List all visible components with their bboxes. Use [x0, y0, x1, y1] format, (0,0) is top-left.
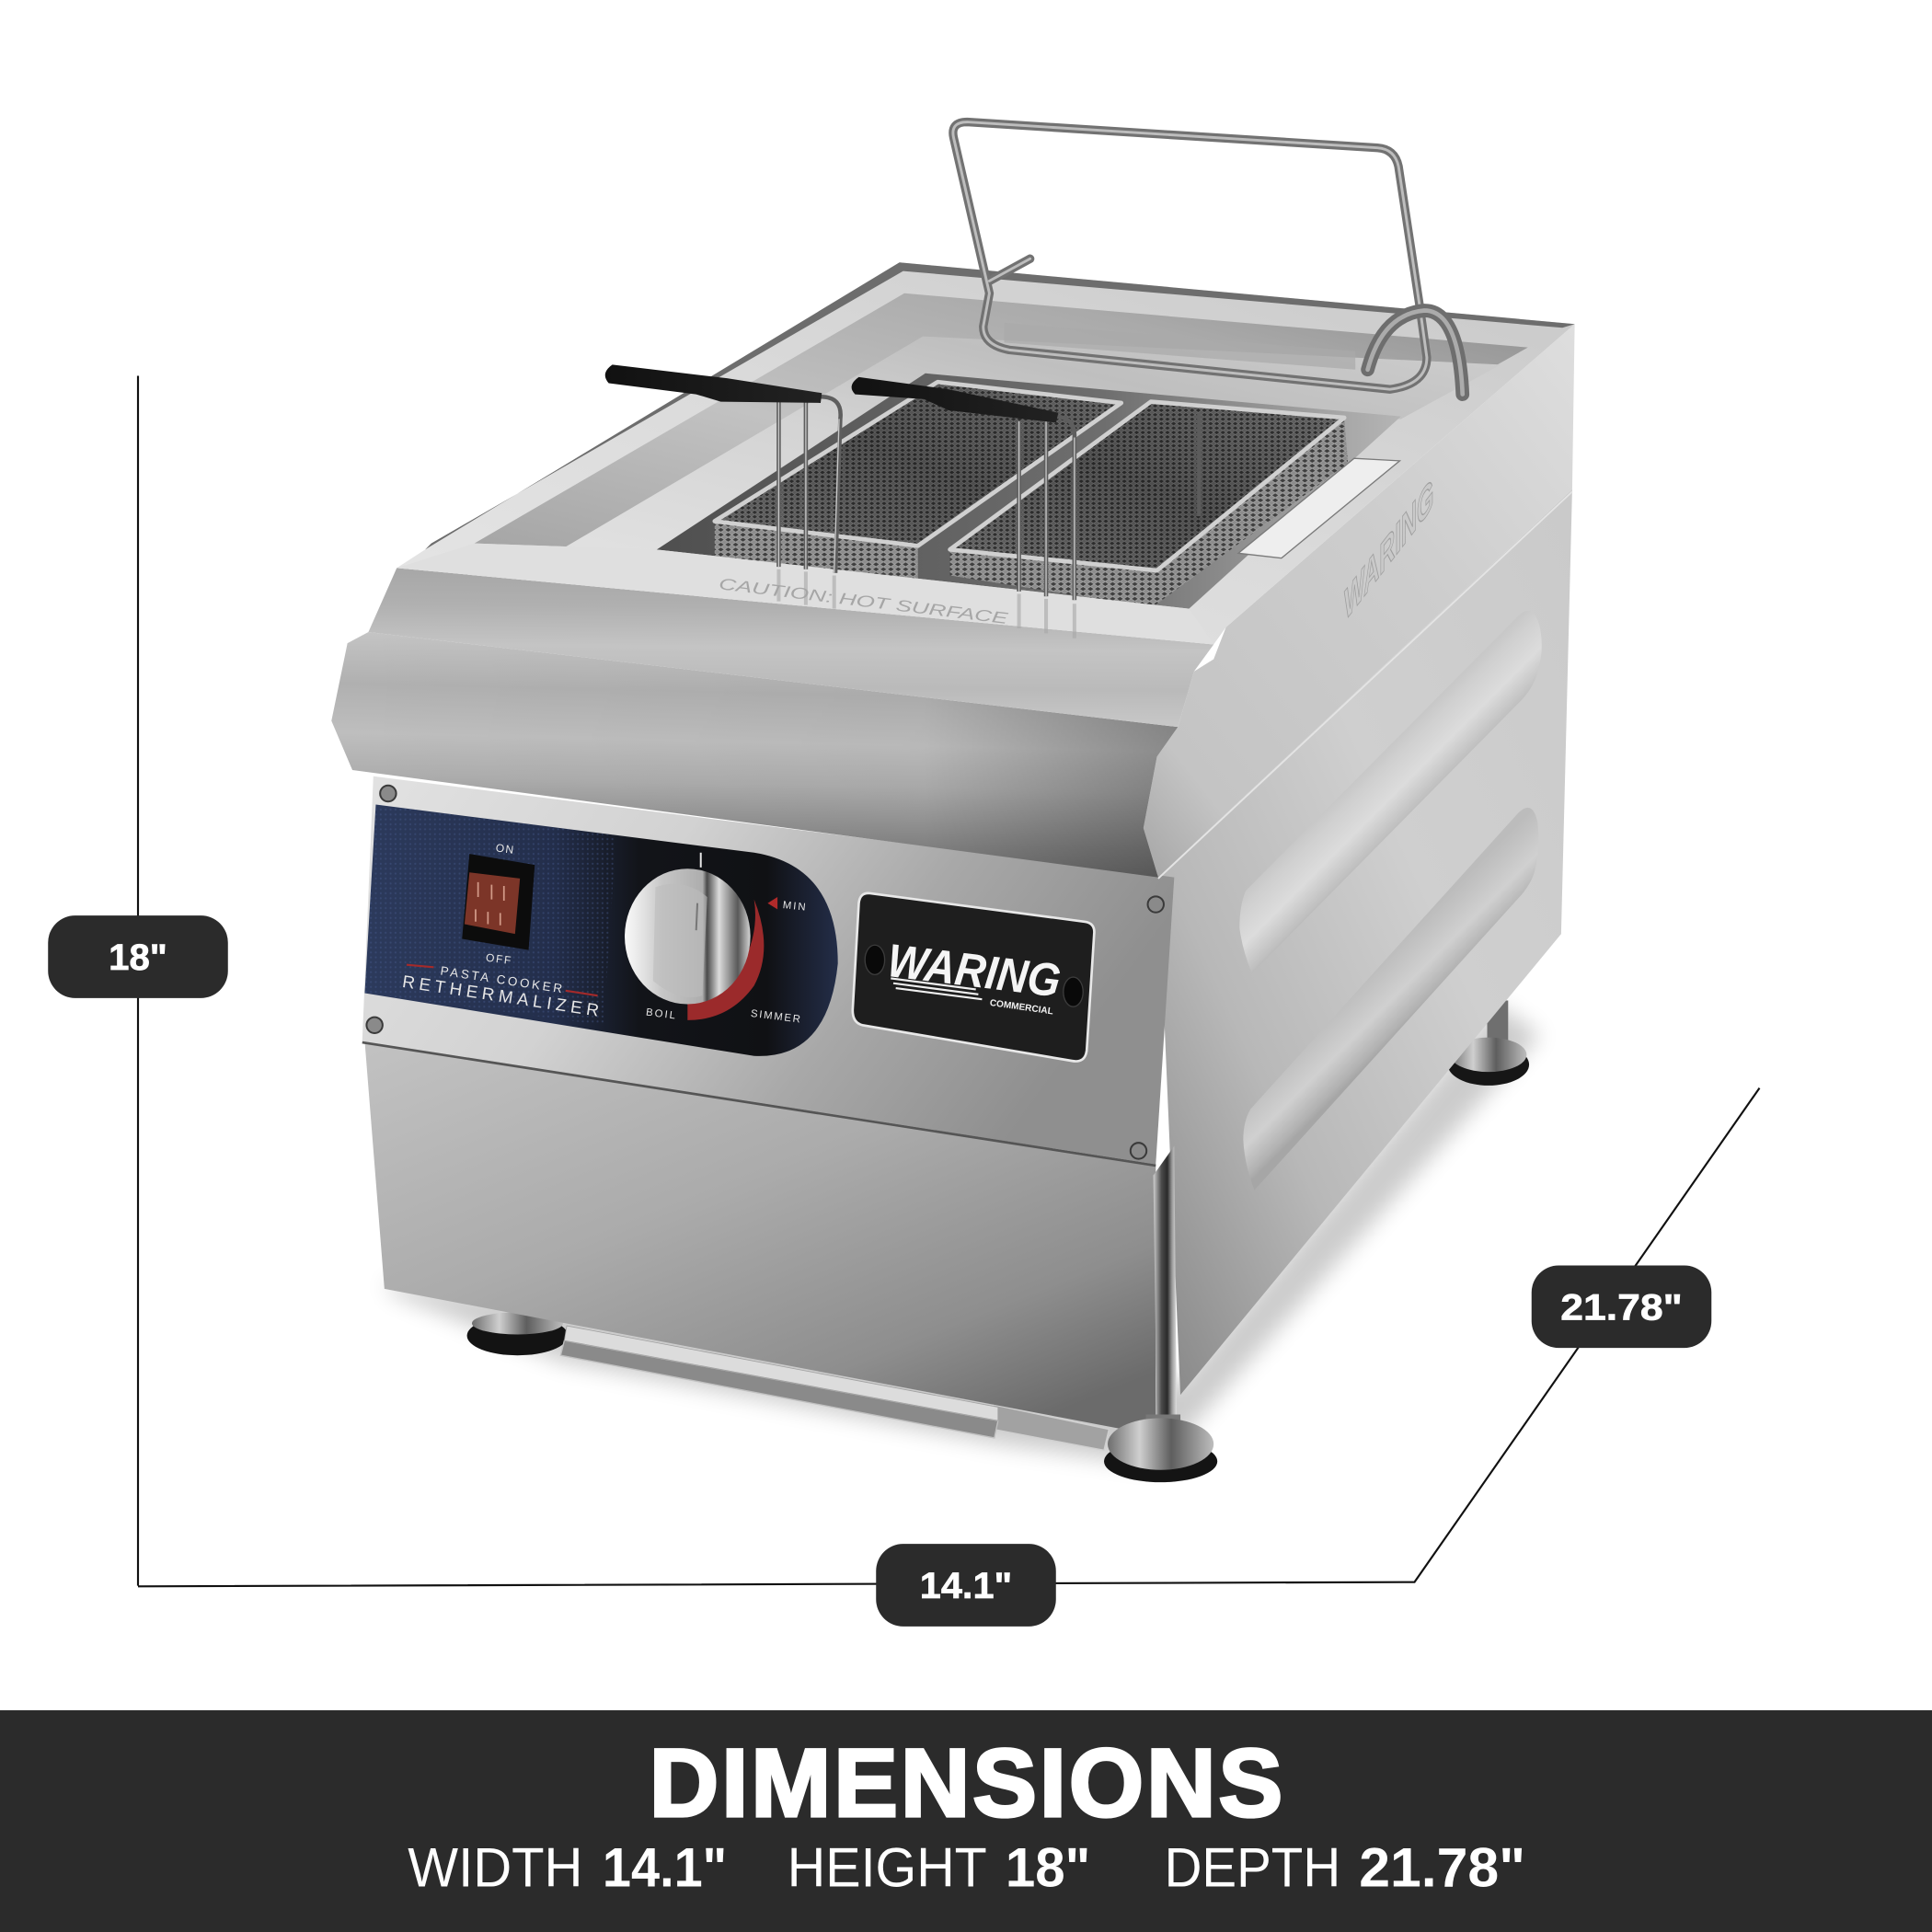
hood front face [331, 632, 1178, 878]
height spec: HEIGHT [788, 1835, 987, 1898]
title: DIMENSIONS [650, 1730, 1282, 1837]
footer band [0, 1710, 1932, 1932]
front deck lip [397, 544, 1213, 644]
side drain slot [1238, 458, 1399, 558]
side panel seam [1158, 491, 1572, 879]
product: pasta cooker rethermalizer [331, 122, 1575, 1482]
depth label pill: 21.78" [1560, 1286, 1683, 1328]
right basket [950, 402, 1348, 607]
embossed side logo: WARING [1344, 466, 1433, 632]
dimension line: height [137, 375, 139, 1586]
on off and product labels: RETHERMALIZER [401, 972, 600, 1020]
on off and product labels: BOIL [645, 1007, 678, 1022]
on off and product labels: SIMMER [750, 1008, 802, 1026]
left front foot [467, 1312, 568, 1355]
water faucet [1368, 311, 1463, 395]
on off and product labels: OFF [485, 951, 513, 967]
dimension line: width and depth [138, 1088, 1759, 1586]
hood sloped face [368, 568, 1213, 727]
wordmark speed lines [891, 978, 982, 999]
lower front panel [364, 1041, 1156, 1435]
Waring logo plate [853, 893, 1094, 1062]
recessed tray wall [475, 293, 1528, 549]
dark back rim [425, 262, 1575, 549]
caution engraving: CAUTION: HOT SURFACE [718, 574, 1009, 627]
height spec [788, 1835, 1090, 1898]
control fascia [362, 776, 1174, 1165]
right basket handle [852, 377, 1075, 600]
recessed tray floor [542, 337, 1501, 560]
width label pill [876, 1544, 1056, 1627]
height label pill: 18" [109, 937, 167, 978]
rear tray shine [1005, 323, 1355, 370]
rod reflections [778, 569, 1075, 638]
floor shadow [385, 1005, 1540, 1466]
panel weave texture [364, 805, 616, 1025]
front corner strip [1154, 1146, 1177, 1433]
back foot [1448, 1001, 1529, 1086]
left basket handle [605, 364, 841, 573]
Waring wordmark: WARING [885, 934, 1064, 1007]
on off and product labels [401, 842, 808, 1026]
under plate [993, 1405, 1109, 1450]
width spec [408, 1835, 727, 1898]
on off and product labels: MIN [782, 900, 808, 914]
rocker switch [462, 854, 535, 950]
red temperature arc [687, 900, 764, 1020]
depth spec: DEPTH [1165, 1835, 1340, 1898]
depth label pill [1532, 1265, 1711, 1348]
control knob [625, 868, 751, 1005]
height label pill [48, 915, 228, 998]
embossed side rib upper [1239, 611, 1542, 973]
control label panel [364, 805, 838, 1056]
embossed side rib lower [1243, 808, 1538, 1190]
commercial tag: COMMERCIAL [989, 998, 1054, 1018]
lower side panel [1158, 489, 1572, 1395]
height spec: 18" [1006, 1835, 1090, 1898]
top deck [397, 262, 1575, 644]
basin opening [657, 374, 1401, 609]
navy panel background [364, 805, 838, 1056]
lift frame [953, 122, 1427, 389]
fascia screws [366, 786, 1164, 1159]
red accent rules [407, 965, 598, 995]
depth spec [1165, 1835, 1525, 1898]
upper side panel [1144, 324, 1575, 878]
right foot [1104, 1415, 1217, 1482]
width label pill: 14.1" [920, 1565, 1012, 1606]
plate bolts [865, 945, 1083, 1006]
left basket [715, 382, 1121, 584]
depth spec: 21.78" [1359, 1835, 1525, 1898]
on off and product labels: PASTA COOKER [440, 964, 566, 996]
on off and product labels: ON [495, 842, 515, 857]
drip tray [560, 1326, 998, 1438]
width spec: 14.1" [603, 1835, 727, 1898]
width spec: WIDTH [408, 1835, 582, 1898]
fascia lower edge [362, 1042, 1156, 1166]
min marker [767, 897, 777, 909]
hood front right falloff [331, 632, 1178, 878]
